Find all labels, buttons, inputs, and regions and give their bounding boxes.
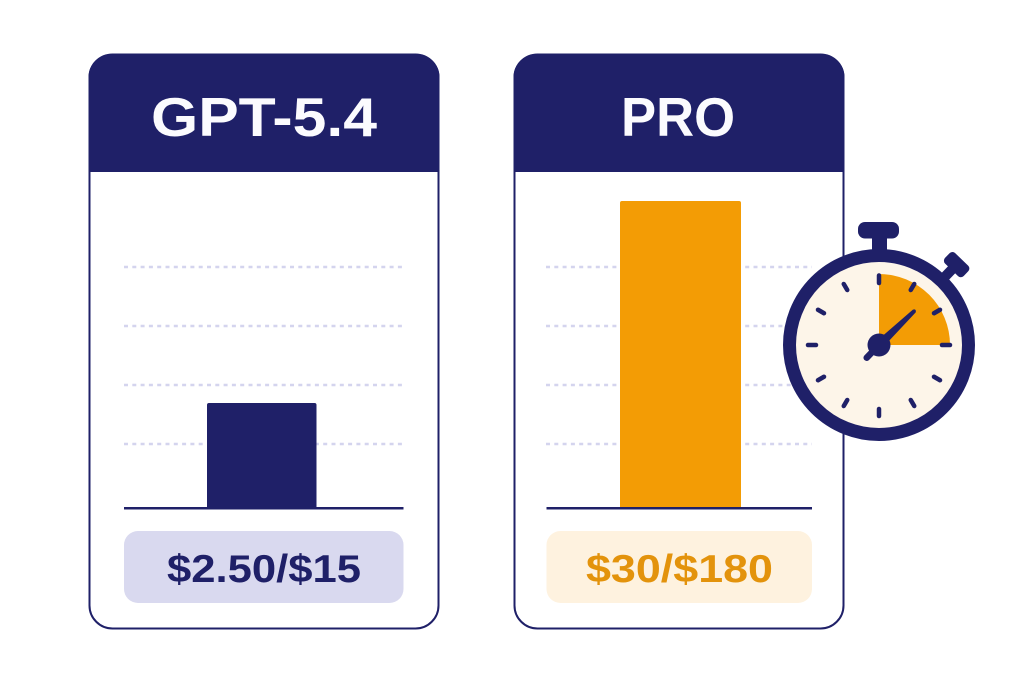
card 2 outline bbox=[514, 54, 844, 628]
card 1 outline bbox=[90, 54, 438, 628]
price pill: $2.50/$15: $2.50/$15 bbox=[167, 548, 361, 591]
stopwatch orange quarter wedge bbox=[879, 274, 950, 345]
price pill: $30/$180 bbox=[546, 531, 812, 603]
card 1 header band bbox=[88, 54, 440, 172]
baseline axis 2 bbox=[546, 507, 812, 510]
stopwatch tick marks bbox=[808, 276, 950, 416]
heading: PRO: PRO bbox=[621, 86, 735, 148]
stopwatch hand and hub bbox=[867, 309, 916, 358]
stopwatch top button bbox=[858, 222, 899, 256]
bar: GPT-5.4 price bbox=[207, 403, 316, 509]
panel: GPT-5.4 card bbox=[88, 54, 440, 628]
heading: GPT-5.4: GPT-5.4 bbox=[151, 86, 377, 148]
panel: PRO card bbox=[514, 54, 844, 628]
icon: stopwatch bbox=[790, 222, 971, 434]
price pill: $2.50/$15 bbox=[124, 531, 404, 603]
baseline axis 1 bbox=[124, 507, 404, 510]
stopwatch side button bbox=[931, 250, 971, 290]
card 2 header band bbox=[514, 54, 844, 172]
price pill: $30/$180: $30/$180 bbox=[586, 548, 773, 591]
stopwatch dial bbox=[790, 256, 968, 434]
bar: PRO price bbox=[620, 201, 741, 509]
